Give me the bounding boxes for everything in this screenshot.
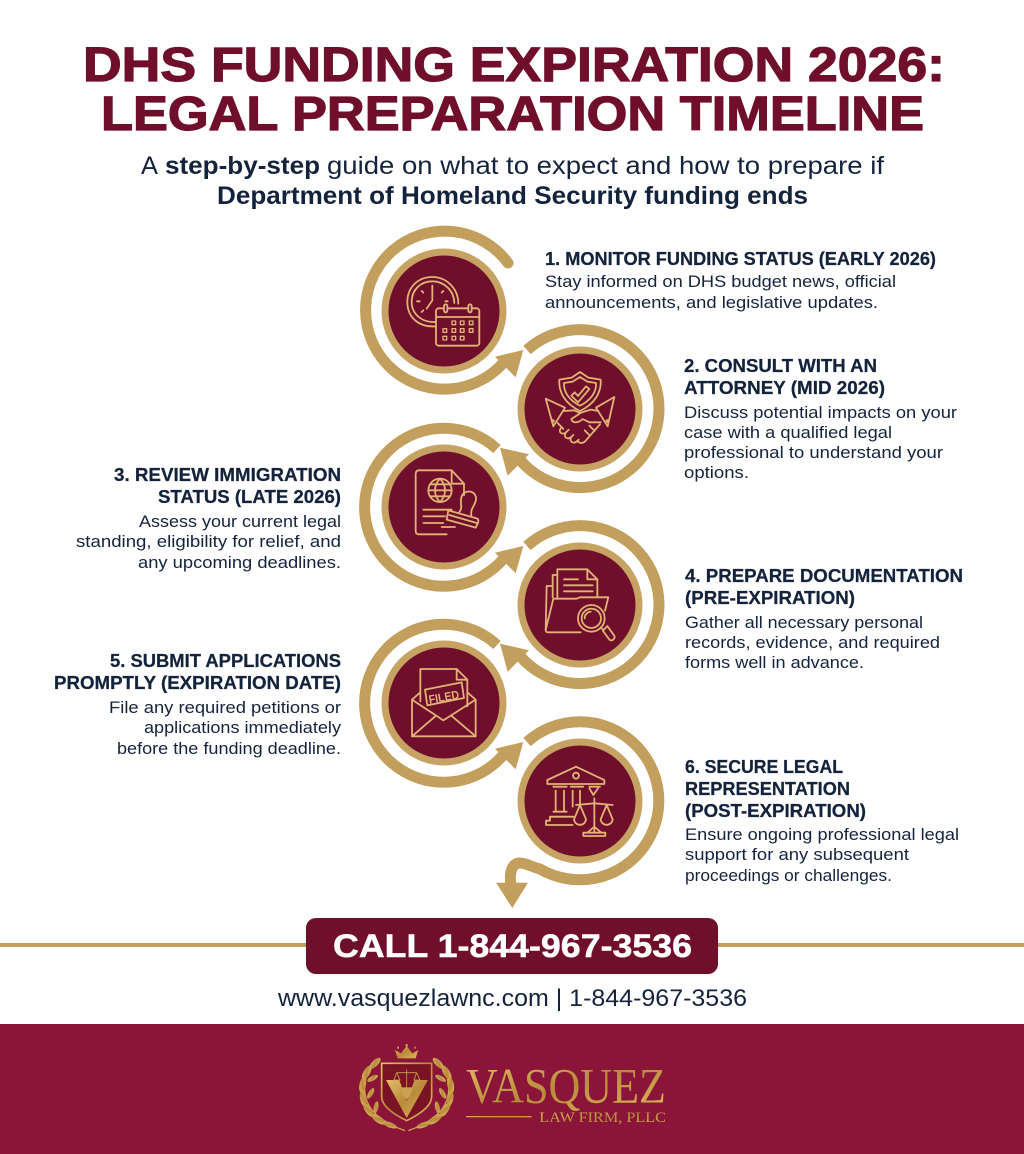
logo laurel right — [408, 1056, 455, 1131]
title — [83, 39, 945, 141]
step 3 text — [76, 464, 341, 572]
step 3 icon: passport document and stamp — [385, 448, 503, 566]
step 1 icon: clock and calendar — [385, 252, 503, 370]
step 2 text — [684, 355, 957, 482]
step 5 icon: envelope with filed document — [385, 644, 503, 762]
step 1 text: 1. MONITOR FUNDING STATUS (EARLY 2026) — [545, 248, 936, 269]
step 5 icon: envelope with filed document: FILED — [428, 688, 461, 707]
arrow arc: step 1 to step 2 — [366, 231, 523, 389]
title: LEGAL PREPARATION TIMELINE — [101, 88, 924, 141]
call to action button — [306, 918, 718, 974]
step 5 text: 5. SUBMIT APPLICATIONS — [110, 650, 341, 671]
step 4 text: Gather all necessary personal — [685, 613, 923, 632]
timeline spiral connectors — [365, 231, 659, 908]
step 2 text: Discuss potential impacts on your — [684, 403, 957, 422]
logo wordmark: VASQUEZ — [466, 1059, 666, 1114]
arrow arc: step 3 to step 4 — [365, 428, 523, 586]
subtitle: Department of Homeland Security funding ends — [217, 182, 808, 210]
footer band — [0, 1024, 1024, 1154]
subtitle: A — [141, 152, 158, 180]
arrow arc: step 6 exit — [496, 722, 659, 908]
logo laurel left — [358, 1056, 405, 1131]
logo crown — [395, 1044, 418, 1058]
step 5 text: before the funding deadline. — [117, 739, 341, 758]
logo shield — [382, 1063, 432, 1121]
step 6 text: REPRESENTATION — [685, 778, 850, 799]
step 6 text: Ensure ongoing professional legal — [685, 825, 959, 844]
step 6 text: 6. SECURE LEGAL — [685, 756, 843, 777]
subtitle: guide on what to expect and how to prepare if — [327, 152, 884, 180]
gold divider right — [718, 943, 1024, 947]
title: DHS FUNDING EXPIRATION 2026: — [83, 39, 945, 92]
step 1 text: Stay informed on DHS budget news, official — [545, 272, 896, 291]
step 6 icon: courthouse and scales — [521, 742, 639, 860]
step 4 text: 4. PREPARE DOCUMENTATION — [685, 565, 963, 586]
arrow arc: step 4 to step 5 — [500, 526, 659, 684]
step 4 text: forms well in advance. — [685, 653, 864, 672]
step 6 text: (POST-EXPIRATION) — [685, 800, 866, 821]
logo: Vasquez Law Firm — [358, 1044, 666, 1131]
step 5 text: PROMPTLY (EXPIRATION DATE) — [54, 672, 341, 693]
logo wordmark: LAW FIRM, PLLC — [539, 1110, 666, 1126]
step 2 text: professional to understand your — [684, 443, 943, 462]
gold divider left — [0, 943, 306, 947]
website and phone: www.vasquezlawnc.com | 1-844-967-3536 — [277, 985, 747, 1012]
step 5 text: File any required petitions or — [109, 698, 341, 717]
subtitle: step-by-step — [165, 152, 320, 180]
step 3 text: 3. REVIEW IMMIGRATION — [114, 464, 341, 485]
step 3 text: standing, eligibility for relief, and — [76, 532, 341, 551]
call to action button: CALL 1-844-967-3536 — [333, 928, 692, 964]
step 1 text: announcements, and legislative updates. — [545, 293, 878, 312]
step 2 text: options. — [684, 463, 749, 482]
step 2 icon: shield and handshake — [521, 350, 639, 468]
step 1 text — [545, 248, 936, 312]
arrow arc: step 2 to step 3 — [500, 330, 659, 488]
subtitle — [141, 152, 884, 210]
step 4 text: (PRE-EXPIRATION) — [685, 587, 855, 608]
step 5 text — [54, 650, 342, 758]
step 3 text: any upcoming deadlines. — [138, 553, 341, 572]
step 4 text: records, evidence, and required — [685, 633, 940, 652]
step 2 text: 2. CONSULT WITH AN — [684, 355, 877, 376]
step 4 text — [685, 565, 963, 672]
step 5 text: applications immediately — [144, 718, 342, 737]
step 2 text: ATTORNEY (MID 2026) — [684, 377, 885, 398]
step 3 text: Assess your current legal — [139, 512, 341, 531]
step 2 text: case with a qualified legal — [684, 423, 892, 442]
step 3 text: STATUS (LATE 2026) — [158, 486, 341, 507]
arrow arc: step 5 to step 6 — [365, 624, 523, 782]
step 4 icon: folder with magnifier — [521, 546, 639, 664]
step 6 text — [685, 756, 959, 885]
step 6 text: support for any subsequent — [685, 845, 909, 864]
step 6 text: proceedings or challenges. — [685, 866, 892, 885]
